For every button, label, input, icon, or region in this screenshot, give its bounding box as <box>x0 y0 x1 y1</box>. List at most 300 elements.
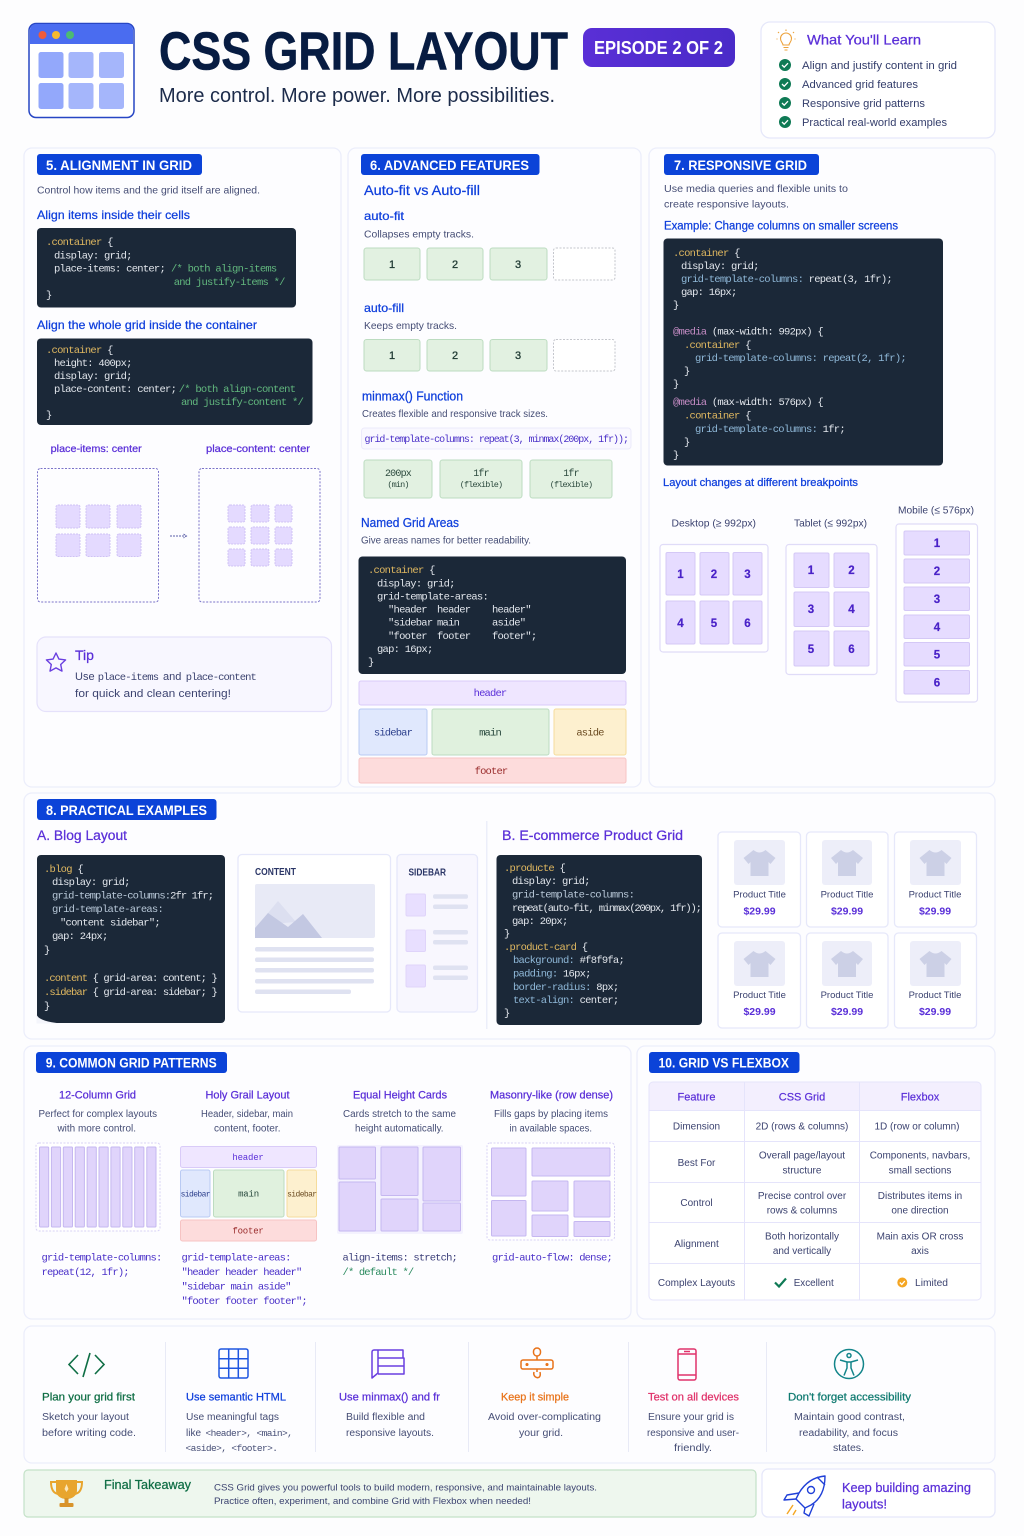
panel: final takeaway <box>24 1470 756 1517</box>
code block: blog: .content { grid-area: content; } <box>44 973 217 985</box>
code block: grid-template-areas: "footer <box>388 631 427 643</box>
code block: blog: "content sidebar"; <box>60 918 160 930</box>
table header: Feature <box>678 1091 715 1103</box>
code block: media queries: .container { <box>684 340 751 352</box>
heading: product grid: B. E-commerce Product Grid <box>502 828 683 843</box>
diagram: place-content center: place-content: center <box>206 443 311 455</box>
example heading: Example: Change columns on smaller screens <box>664 220 898 232</box>
code block: grid-template-areas: gap: 16px; <box>377 644 433 656</box>
diagram: named areas: footer <box>475 766 508 778</box>
icon: phone <box>678 1349 696 1380</box>
desktop layout: 2 <box>711 569 717 581</box>
icon: code brackets <box>69 1353 104 1377</box>
auto-fit demo: Collapses empty tracks. <box>364 228 474 240</box>
minmax function: minmax() Function <box>362 390 463 404</box>
row: complex layouts <box>658 1278 948 1289</box>
tip: accessibility: states. <box>833 1443 864 1454</box>
desktop layout: 3 <box>744 569 751 581</box>
heading: align items: Align items inside their cells <box>37 208 190 222</box>
desktop layout <box>660 518 768 652</box>
code block: blog: display: grid; <box>52 877 130 889</box>
tip: accessibility <box>788 1350 912 1454</box>
tip: use semantic html <box>186 1349 292 1454</box>
mobile layout <box>896 504 978 702</box>
code block: place-content: and justify-content */ <box>181 397 304 409</box>
code block: grid-template-areas: "header <box>388 604 427 616</box>
callout: tip <box>37 637 332 712</box>
intro text: create responsive layouts. <box>664 199 789 211</box>
code block: grid-template-areas: .container { <box>368 565 435 577</box>
mobile layout: 6 <box>934 678 940 690</box>
code block: grid-template-areas: header" <box>492 604 531 616</box>
code block: grid-template-areas: grid-template-areas: <box>377 592 488 604</box>
pattern: holy grail layout: content, footer. <box>214 1124 280 1135</box>
pattern: equal height cards: align-items: stretch; <box>342 1252 457 1264</box>
code block: media queries: .container { <box>673 248 740 260</box>
code block: products: repeat(auto-fit, minmax(200px, 1fr)); <box>512 903 701 915</box>
icon: star <box>46 653 66 671</box>
code block: place-content: place-content: center; <box>54 384 176 396</box>
auto-fill demo: Keeps empty tracks. <box>364 320 457 332</box>
panel: 5 alignment in grid <box>24 148 341 787</box>
learn list: Advanced grid features <box>802 79 918 91</box>
diagram: place-items center <box>38 443 158 602</box>
pattern: 12-column grid: 12-Column Grid <box>59 1089 136 1101</box>
icon: stacked tracks <box>372 1350 404 1378</box>
code block: grid-template-areas: "sidebar <box>388 618 433 630</box>
pattern: masonry-like: in available spaces. <box>510 1124 592 1135</box>
takeaway text <box>214 1483 597 1507</box>
tip text <box>75 671 257 700</box>
pattern: equal height cards: Cards stretch to the same <box>343 1109 456 1120</box>
product card 6 <box>894 933 976 1028</box>
tip: keep it simple: Keep it simple <box>501 1392 569 1404</box>
takeaway text: Practice often, experiment, and combine Grid with Flexbox when needed! <box>214 1496 531 1507</box>
row: dimension <box>673 1122 960 1132</box>
minmax function: grid-template-columns: repeat(3, minmax(200px, 1fr)); <box>364 434 628 446</box>
code block: place-items: and justify-items */ <box>174 277 285 289</box>
row: control: Control <box>680 1198 713 1209</box>
pattern: holy grail layout: header <box>232 1153 264 1163</box>
panel: 9 common grid patterns <box>24 1046 631 1319</box>
tablet layout: 5 <box>808 644 815 656</box>
code block: grid-template-areas: footer"; <box>492 631 536 643</box>
named grid areas heading: Named Grid Areas <box>361 516 459 530</box>
code block: blog: .sidebar { grid-area: sidebar; } <box>44 987 217 999</box>
pattern: holy grail layout: sidebar <box>287 1191 317 1200</box>
code block: products: background: #f8f9fa; <box>513 955 624 967</box>
code block: place-content: display: grid; <box>54 371 132 383</box>
tip: keep it simple: Avoid over-complicating <box>488 1412 601 1423</box>
learn list: Practical real-world examples <box>802 117 947 129</box>
row: control <box>680 1191 962 1216</box>
desktop layout: Desktop (≥ 992px) <box>672 518 756 530</box>
code block: blog: .blog { <box>44 864 83 876</box>
code block: products: text-align: center; <box>513 995 618 1007</box>
learn list: Align and justify content in grid <box>802 60 957 72</box>
learn list <box>779 59 957 129</box>
section tag 6: 6. ADVANCED FEATURES <box>370 157 529 173</box>
code block: media queries: } <box>673 379 679 391</box>
pattern: holy grail layout: footer <box>232 1227 264 1237</box>
tip: accessibility: readability, and focus <box>799 1428 898 1439</box>
row: best for: Overall page/layout <box>759 1151 845 1162</box>
code block: grid-template-areas: } <box>368 657 374 669</box>
learn heading: What You'll Learn <box>807 32 921 48</box>
row: best for: structure <box>783 1165 822 1176</box>
panel: 6 advanced features <box>348 148 641 787</box>
row: complex layouts: Limited <box>915 1278 948 1289</box>
diagram: place-content center <box>199 443 320 602</box>
row: alignment: Main axis OR cross <box>877 1232 963 1243</box>
minmax function: 1fr <box>473 468 490 480</box>
section tag 7: 7. RESPONSIVE GRID <box>674 157 807 173</box>
pattern: equal height cards: /* default */ <box>342 1267 414 1279</box>
panel: 7 responsive grid <box>649 148 995 787</box>
code block: blog: grid-template-columns:2fr 1fr; <box>52 890 213 902</box>
code block: products: gap: 20px; <box>512 916 568 928</box>
tablet layout: Tablet (≤ 992px) <box>794 518 867 530</box>
code block: place-items: display: grid; <box>54 250 132 262</box>
code block: grid-template-areas <box>358 556 626 674</box>
pattern: holy grail layout: "sidebar main aside" <box>182 1282 291 1294</box>
product card 1: Product Title <box>733 890 786 901</box>
minmax function <box>362 390 631 498</box>
title: CSS GRID LAYOUT <box>159 22 568 82</box>
mobile layout: 4 <box>934 622 941 634</box>
diagram: named areas: header <box>474 688 507 700</box>
comparison table <box>649 1082 981 1300</box>
tablet layout: 3 <box>808 604 814 616</box>
pattern: 12-column grid <box>36 1089 161 1279</box>
tip: plan your grid first: Plan your grid first <box>42 1392 135 1404</box>
code block: place-content <box>37 338 312 425</box>
tip text: and <box>163 671 181 683</box>
mockup: sidebar card: SIDEBAR <box>408 868 447 879</box>
tip text: place-items <box>98 672 159 684</box>
pattern: holy grail layout: main <box>238 1190 259 1200</box>
code block: products <box>496 855 702 1025</box>
tip: use minmax and fr: Build flexible and <box>346 1412 425 1423</box>
pattern: equal height cards: Equal Height Cards <box>353 1089 447 1101</box>
section tag 10: 10. GRID VS FLEXBOX <box>658 1055 790 1071</box>
code block: grid-template-areas: aside" <box>492 618 525 630</box>
tablet layout: 1 <box>808 565 815 577</box>
episode badge: EPISODE 2 OF 2 <box>594 38 723 58</box>
code block: place-items: .container { <box>46 237 113 249</box>
row: dimension: Dimension <box>673 1122 720 1132</box>
code block: blog: grid-template-areas: <box>52 904 163 916</box>
desktop layout: 6 <box>744 618 751 630</box>
product card grid <box>718 832 976 1028</box>
panel: 10 grid vs flexbox <box>637 1046 995 1319</box>
tip: keep it simple: your grid. <box>519 1428 563 1439</box>
code block: place-items: /* both align-items <box>171 264 277 276</box>
row: dimension: 1D (row or column) <box>874 1122 960 1132</box>
icon: light bulb <box>776 30 796 50</box>
code block: products: .producte { <box>504 863 566 875</box>
episode badge <box>583 28 735 67</box>
tip: use semantic html: Use meaningful tags <box>186 1412 279 1423</box>
row: alignment: axis <box>911 1246 929 1257</box>
tip: accessibility: Maintain good contrast, <box>794 1412 905 1423</box>
icon: accessibility <box>834 1350 864 1378</box>
diagram: place-items center: place-items: center <box>51 443 142 455</box>
tablet layout: 4 <box>848 604 855 616</box>
mockup: content card <box>238 854 390 1012</box>
tip: plan your grid first: before writing code. <box>42 1428 136 1439</box>
auto-fill demo: 2 <box>452 350 458 362</box>
tablet layout: 6 <box>848 644 855 656</box>
minmax function: 1fr <box>563 468 580 480</box>
pattern: masonry-like: Fills gaps by placing items <box>494 1109 608 1120</box>
code block: products: border-radius: 8px; <box>513 982 618 994</box>
auto-fill demo: auto-fill <box>364 301 404 315</box>
pattern: holy grail layout: grid-template-areas: <box>182 1252 291 1264</box>
row: best for: Best For <box>678 1158 716 1169</box>
tip text: place-content <box>186 672 257 684</box>
product card 3: $29.99 <box>919 905 951 917</box>
desktop layout: 5 <box>711 618 718 630</box>
code block: media queries: gap: 16px; <box>681 287 737 299</box>
code block: media queries: } <box>684 437 690 449</box>
code block: place-content: /* both align-content <box>179 384 296 396</box>
section tag 9 <box>36 1052 227 1073</box>
code block: grid-template-areas: header <box>437 604 471 616</box>
code block: media queries: display: grid; <box>681 261 759 273</box>
code block: place-items <box>37 228 296 308</box>
closing message <box>842 1480 971 1512</box>
section tag 10 <box>649 1052 800 1073</box>
heading: blog layout: A. Blog Layout <box>37 828 127 843</box>
code block: blog: gap: 24px; <box>52 931 108 943</box>
code block: grid-template-areas: footer <box>437 631 471 643</box>
code block: products: display: grid; <box>512 876 590 888</box>
icon: trophy <box>51 1480 82 1507</box>
section tag 9: 9. COMMON GRID PATTERNS <box>46 1055 217 1071</box>
section tag 8: 8. PRACTICAL EXAMPLES <box>46 802 207 818</box>
product card 3: Product Title <box>909 890 961 901</box>
closing message: Keep building amazing <box>842 1480 971 1495</box>
code block: media queries: @media (max-width: 992px) { <box>673 326 823 338</box>
minmax function: (min) <box>387 480 409 490</box>
mobile layout: Mobile (≤ 576px) <box>898 504 974 516</box>
auto-fill demo: 1 <box>389 350 395 362</box>
auto-fit demo: 1 <box>389 259 395 271</box>
minmax function: (flexible) <box>550 480 592 490</box>
pattern: holy grail layout: sidebar <box>181 1191 211 1200</box>
takeaway heading: Final Takeaway <box>104 1478 192 1492</box>
tip: plan your grid first: Sketch your layout <box>42 1412 129 1423</box>
pattern: masonry-like: grid-auto-flow: dense; <box>492 1252 612 1264</box>
code block: media queries: } <box>673 450 679 462</box>
tablet layout: 2 <box>848 565 855 577</box>
tip: test on all devices: responsive and user- <box>647 1428 739 1439</box>
row: best for: Components, navbars, <box>870 1151 970 1162</box>
pattern: 12-column grid: grid-template-columns: <box>42 1252 161 1264</box>
diagram: named areas: main <box>479 728 501 740</box>
breakpoints heading: Layout changes at different breakpoints <box>663 477 858 489</box>
code block: media queries: @media (max-width: 576px) { <box>673 397 823 409</box>
pattern: 12-column grid: Perfect for complex layouts <box>38 1109 157 1120</box>
tip: use minmax and fr: Use minmax() and fr <box>339 1392 440 1404</box>
row: control: Precise control over <box>758 1191 847 1202</box>
auto-fit demo: 3 <box>515 259 521 271</box>
code block: products: .product-card { <box>504 942 588 954</box>
code block: place-content: .container { <box>46 345 113 357</box>
code block: place-items: } <box>46 290 52 302</box>
auto-fit demo <box>364 209 615 280</box>
row: alignment: and vertically <box>773 1246 831 1257</box>
row: alignment: Both horizontally <box>765 1232 839 1243</box>
tip: use semantic html: Use semantic HTML <box>186 1392 286 1404</box>
named grid areas text: Give areas names for better readability. <box>361 536 531 547</box>
panel: 8 practical examples <box>24 793 995 1039</box>
diagram: named areas: sidebar <box>374 728 413 740</box>
pattern: holy grail layout: "footer footer footer"; <box>182 1296 307 1308</box>
tip: use minmax and fr <box>339 1350 440 1439</box>
tip: plan your grid first <box>42 1353 136 1439</box>
tip heading: Tip <box>75 647 94 663</box>
arrow <box>170 534 186 538</box>
product card 5 <box>806 933 888 1028</box>
auto-fill demo <box>364 301 615 371</box>
code block: grid-template-areas: display: grid; <box>377 578 455 590</box>
code block: media queries: grid-template-columns: 1fr; <box>695 424 845 436</box>
minmax function: Creates flexible and responsive track sizes. <box>362 408 548 420</box>
product card 2: Product Title <box>821 890 873 901</box>
row: control: rows & columns <box>767 1205 837 1216</box>
intro text: Control how items and the grid itself are aligned. <box>37 184 260 196</box>
pattern: holy grail layout <box>180 1089 317 1308</box>
heading: align whole grid: Align the whole grid inside the container <box>37 318 257 332</box>
code block: place-items: place-items: center; <box>54 264 165 276</box>
code block: media queries: grid-template-columns: repeat(3, 1fr); <box>681 274 892 286</box>
tip: test on all devices: Test on all devices <box>648 1392 739 1404</box>
mockup: content card: CONTENT <box>255 867 296 878</box>
mobile layout: 2 <box>934 566 940 578</box>
panel: best practices <box>24 1326 995 1463</box>
row: control: one direction <box>891 1205 949 1216</box>
tip: test on all devices: Ensure your grid is <box>648 1412 734 1423</box>
product card 6: $29.99 <box>919 1006 951 1018</box>
code block: products: grid-template-columns: <box>512 890 634 902</box>
row: complex layouts: Complex Layouts <box>658 1278 735 1289</box>
code block: media queries: grid-template-columns: repeat(2, 1fr); <box>695 353 906 365</box>
code block: products: } <box>504 1008 510 1020</box>
row: alignment <box>674 1232 963 1257</box>
tip: use semantic html: <header>, <main>, <box>206 1428 292 1439</box>
row: best for <box>678 1151 970 1176</box>
code block: products: padding: 16px; <box>513 968 591 980</box>
tablet layout <box>786 518 877 674</box>
product card 2: $29.99 <box>831 905 863 917</box>
takeaway text: CSS Grid gives you powerful tools to build modern, responsive, and maintainable layouts. <box>214 1483 597 1494</box>
learn list: Responsive grid patterns <box>802 98 925 110</box>
icon: browser window with grid <box>29 24 134 118</box>
icon: table grid <box>219 1349 248 1378</box>
table header: Flexbox <box>901 1091 940 1103</box>
code block: blog <box>36 855 225 1024</box>
minmax function: (flexible) <box>460 480 502 490</box>
pattern: 12-column grid: repeat(12, 1fr); <box>42 1267 129 1279</box>
panel: what you'll learn <box>761 22 995 138</box>
tip text: for quick and clean centering! <box>75 688 231 700</box>
code block: grid-template-areas: main <box>437 618 460 630</box>
product card 4 <box>718 933 800 1028</box>
code block: media queries: } <box>673 300 679 312</box>
tip: keep it simple <box>488 1348 601 1439</box>
tip: use minmax and fr: responsive layouts. <box>346 1428 434 1439</box>
pattern: holy grail layout: Holy Grail Layout <box>206 1089 290 1101</box>
diagram: named areas: aside <box>576 728 604 740</box>
product card 1 <box>718 832 800 927</box>
row: complex layouts: Excellent <box>794 1278 834 1289</box>
pattern: masonry-like: Masonry-like (row dense) <box>490 1089 613 1101</box>
icon: rocket <box>784 1476 825 1516</box>
minmax function: 200px <box>385 469 412 480</box>
row: dimension: 2D (rows & columns) <box>756 1122 848 1132</box>
diagram: named areas <box>359 681 626 783</box>
row: alignment: Alignment <box>674 1239 719 1250</box>
mobile layout: 1 <box>934 538 941 550</box>
pattern: equal height cards: height automatically. <box>355 1124 444 1135</box>
product card 1: $29.99 <box>743 905 776 917</box>
tip: use semantic html: like <box>186 1428 201 1439</box>
row: control: Distributes items in <box>878 1191 962 1202</box>
pattern: equal height cards <box>337 1089 463 1279</box>
pattern: holy grail layout: "header header header" <box>182 1267 301 1279</box>
panel: keep building <box>762 1469 995 1517</box>
mockup: sidebar card <box>397 854 478 1012</box>
intro text: Use media queries and flexible units to <box>664 183 848 195</box>
pattern: masonry-like <box>487 1089 614 1264</box>
header <box>29 22 995 138</box>
heading: auto-fit vs auto-fill: Auto-fit vs Auto-fill <box>364 182 480 198</box>
code block: media queries <box>664 238 943 466</box>
auto-fit demo: auto-fit <box>364 209 405 223</box>
code block: blog: } <box>44 1001 50 1013</box>
code block: blog: } <box>44 945 50 957</box>
subtitle: More control. More power. More possibilities. <box>159 85 555 107</box>
tip: use semantic html: <aside>, <footer>. <box>186 1443 277 1454</box>
pattern: holy grail layout: Header, sidebar, main <box>201 1109 293 1120</box>
closing message: layouts! <box>842 1496 887 1512</box>
desktop layout: 1 <box>677 569 684 581</box>
row: best for: small sections <box>889 1165 951 1176</box>
mobile layout: 3 <box>934 594 940 606</box>
code block: products: } <box>504 928 510 940</box>
table header: CSS Grid <box>779 1091 825 1103</box>
product card 5: Product Title <box>821 990 873 1001</box>
tip text: Use <box>75 671 95 683</box>
intro text <box>664 183 848 211</box>
product card 6: Product Title <box>909 990 961 1001</box>
code block: place-content: height: 400px; <box>54 358 132 370</box>
icon: simple component <box>521 1348 553 1378</box>
tip: test on all devices: friendly. <box>674 1443 712 1454</box>
product card 4: Product Title <box>733 990 786 1001</box>
tip: accessibility: Don't forget accessibility <box>788 1392 912 1404</box>
product card 5: $29.99 <box>831 1006 863 1018</box>
product card 3 <box>894 832 976 927</box>
code block: place-content: } <box>46 410 52 422</box>
auto-fill demo: 3 <box>515 350 521 362</box>
desktop layout: 4 <box>677 618 684 630</box>
product card 4: $29.99 <box>743 1006 776 1018</box>
pattern: 12-column grid: with more control. <box>57 1124 136 1135</box>
mobile layout: 5 <box>934 650 941 662</box>
